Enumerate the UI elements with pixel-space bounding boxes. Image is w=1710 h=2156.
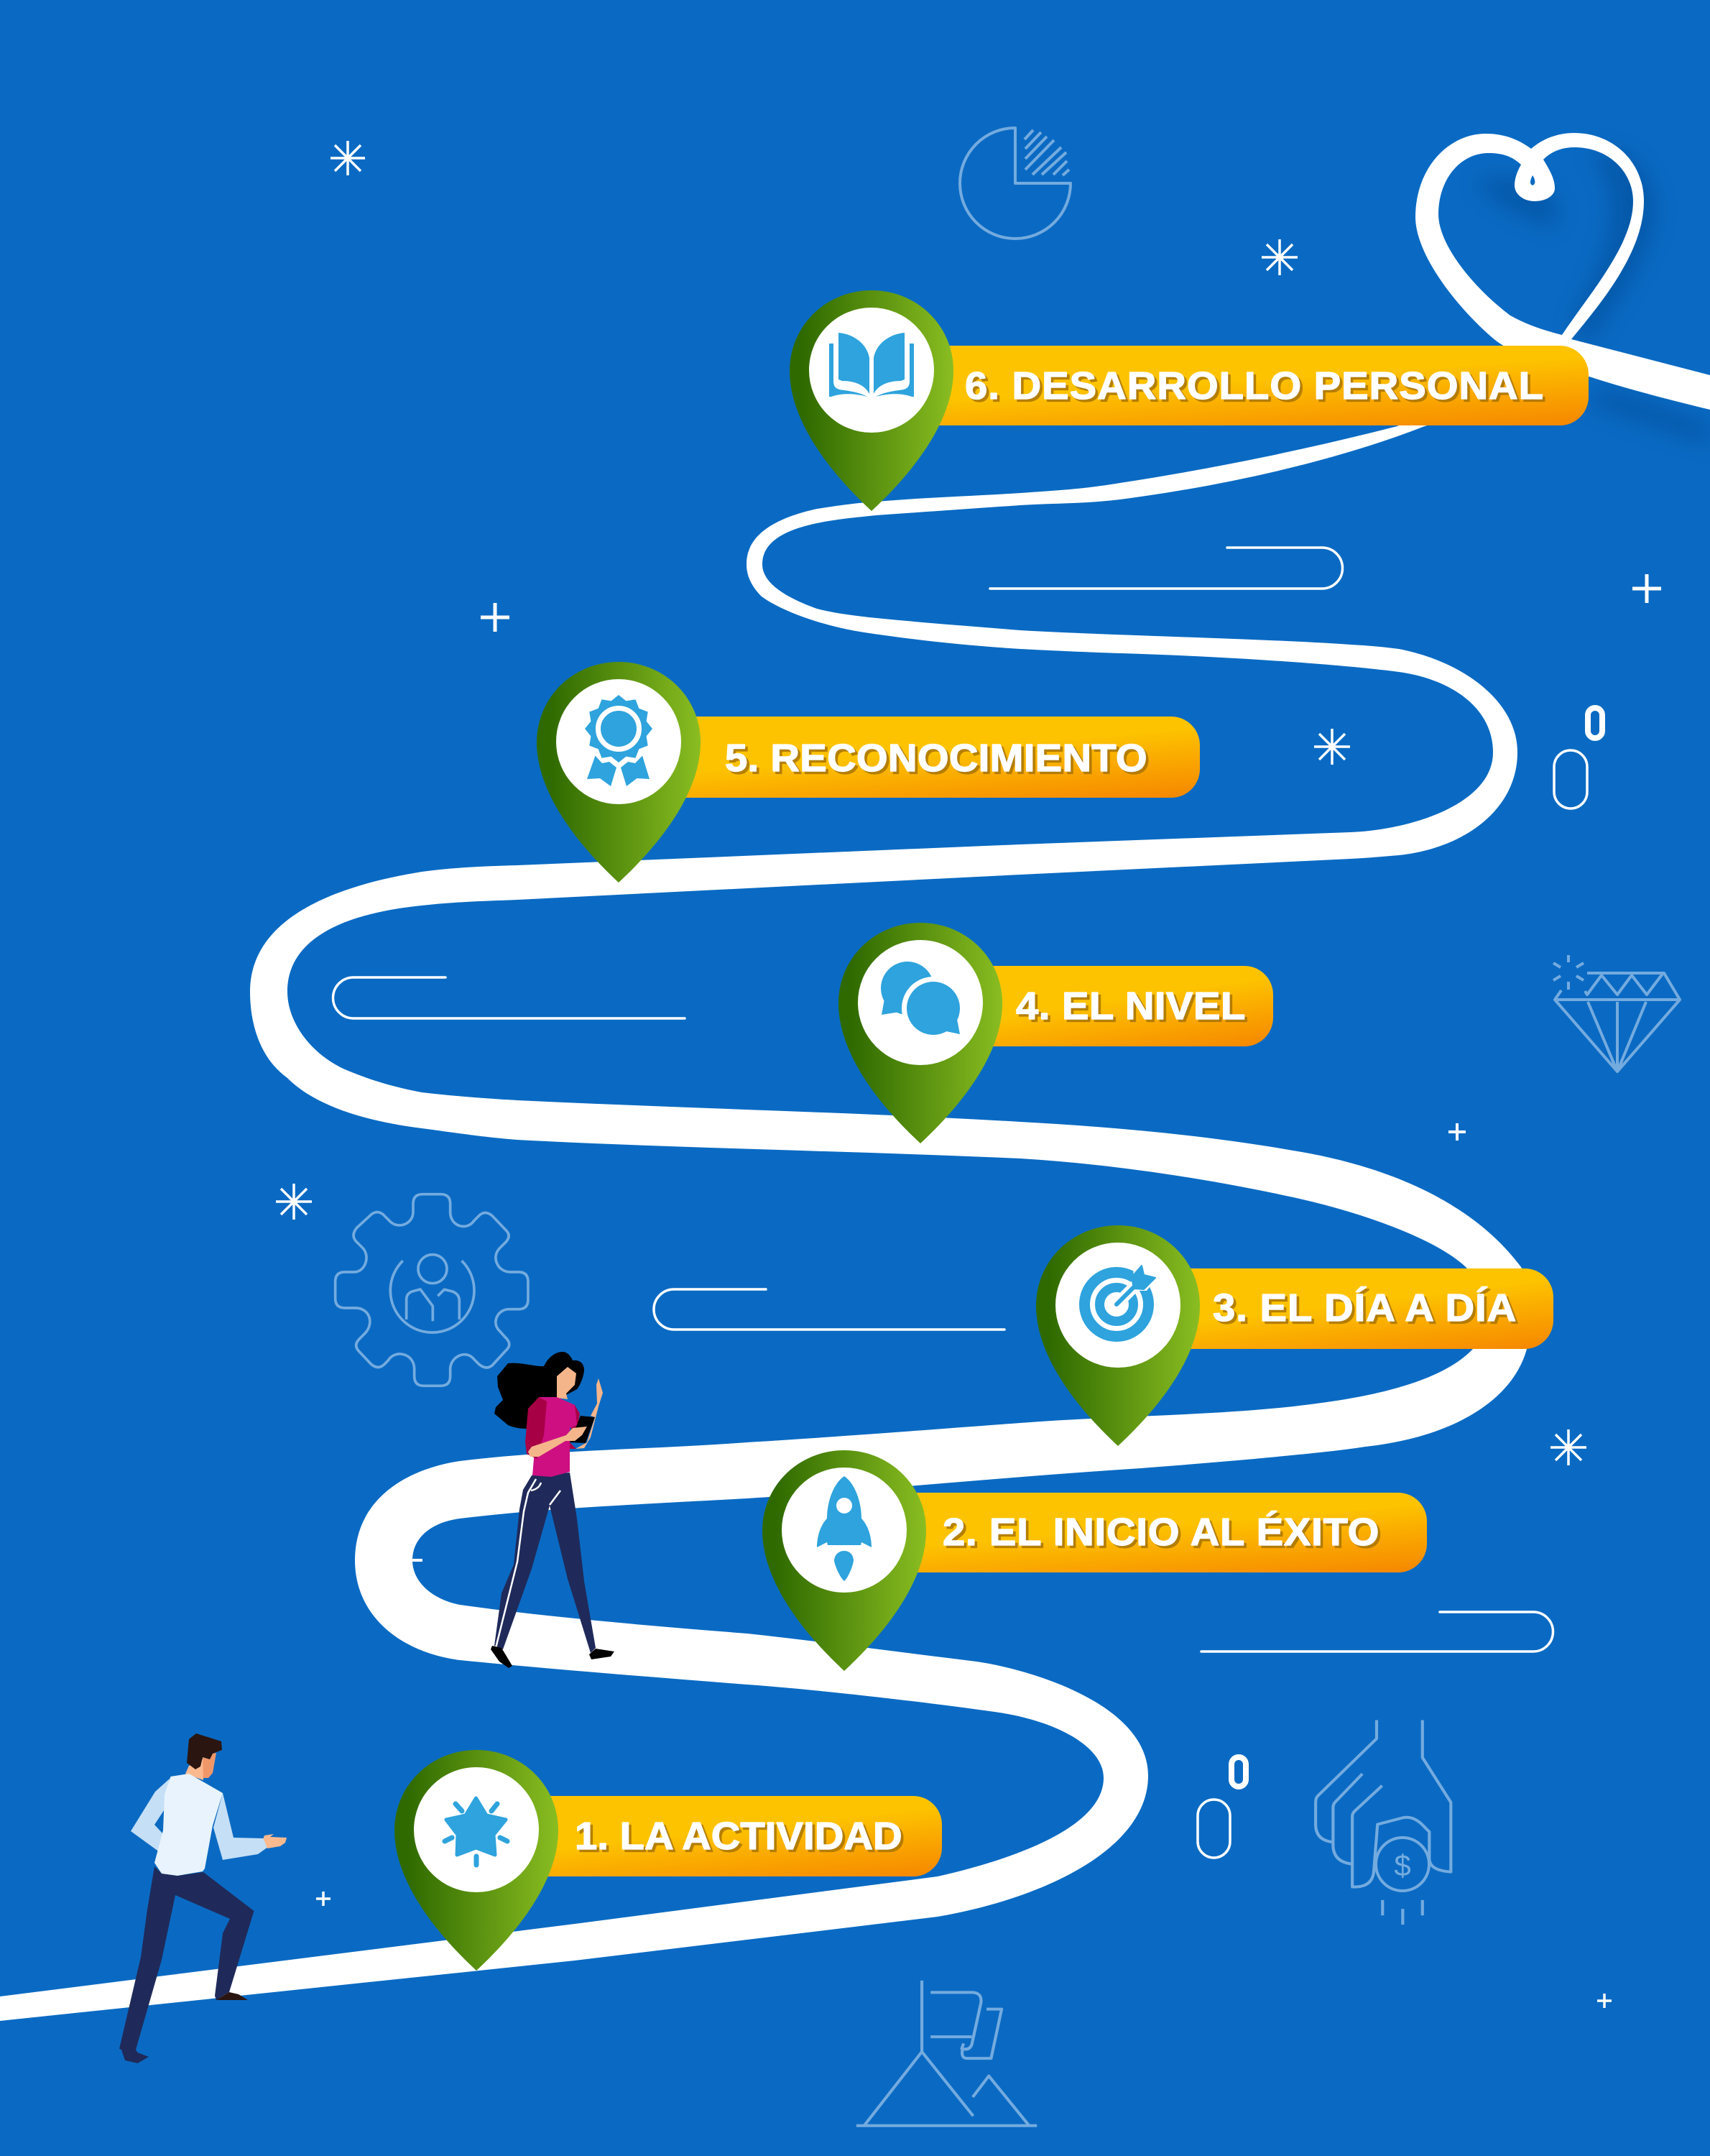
- label 5: [647, 717, 1200, 798]
- label 6: 6. DESARROLLO PERSONAL: [965, 364, 1543, 407]
- winding road: [0, 349, 1589, 2021]
- step 6: desarrollo personal: [790, 290, 1589, 511]
- step 3: el dia a dia: [1036, 1225, 1553, 1446]
- plus decorations: [316, 574, 1661, 2008]
- label 2: [862, 1493, 1427, 1572]
- step 1: la actividad: [394, 1750, 942, 1971]
- label 3: 3. EL DÍA A DÍA: [1213, 1286, 1516, 1330]
- icon: pie chart: [960, 128, 1071, 239]
- figure: man climbing: [119, 1733, 287, 2063]
- pin 6 with book icon: [790, 290, 953, 511]
- small plus behind road: [412, 1559, 422, 1562]
- label 2: 2. EL INICIO AL ÉXITO: [943, 1510, 1379, 1554]
- rounded line decorations: [333, 548, 1553, 1651]
- heart shadow: [1473, 149, 1710, 446]
- label 4: [948, 966, 1273, 1046]
- heart ribbon: [1415, 133, 1710, 410]
- step 5: reconocimiento: [537, 662, 1200, 883]
- step 2: el inicio al exito: [762, 1450, 1427, 1671]
- label 6: [905, 346, 1589, 425]
- icon: hand with coin: [1316, 1720, 1451, 1925]
- label 1: [503, 1796, 942, 1876]
- pin 5 with award icon: [537, 662, 701, 883]
- pin 2 with rocket icon: [762, 1450, 926, 1671]
- snowflake decorations: [276, 141, 1586, 1465]
- icon: flag on mountain: [856, 1981, 1037, 2126]
- pill decorations: [1198, 708, 1602, 1858]
- label 1: 1. LA ACTIVIDAD: [575, 1814, 902, 1858]
- pin 1 with star icon: [394, 1750, 558, 1971]
- label 4: 4. EL NIVEL: [1016, 984, 1245, 1028]
- pin 4 with chat icon: [838, 923, 1002, 1143]
- label 5: 5. RECONOCIMIENTO: [725, 736, 1147, 780]
- step 4: el nivel: [838, 923, 1273, 1143]
- icon: hand with coin: $: [1394, 1848, 1411, 1882]
- figure: woman with tablet: [491, 1352, 614, 1668]
- icon: diamond: [1553, 955, 1680, 1072]
- label 3: [1150, 1268, 1553, 1349]
- pin 3 with target icon: [1036, 1225, 1200, 1446]
- icon: gear with person: [336, 1194, 528, 1386]
